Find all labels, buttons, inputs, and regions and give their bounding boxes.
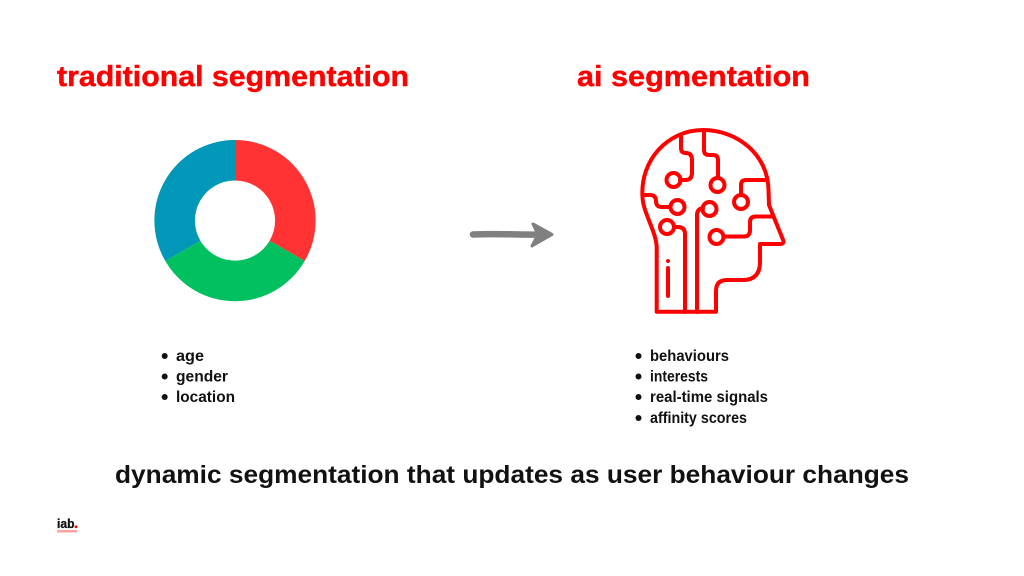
list: traditional attributes: gender: [176, 368, 228, 386]
circuit nodes: [666, 173, 680, 187]
summary statement: dynamic segmentation that updates as user behaviour changes: [115, 461, 909, 489]
list: ai attributes: interests: [650, 368, 708, 386]
circuit lines: [680, 135, 692, 180]
arrow: [473, 224, 552, 246]
list: traditional attributes: age: [176, 348, 204, 365]
list: traditional attributes: [162, 348, 235, 406]
list: ai attributes: behaviours: [650, 348, 729, 365]
small detail: [666, 268, 670, 296]
list: ai attributes: [636, 348, 768, 427]
heading: traditional segmentation: traditional segmentation: [57, 61, 409, 93]
head outline: [642, 130, 784, 312]
list: traditional attributes: location: [176, 389, 235, 406]
logo: iab: iab: [57, 516, 75, 531]
list: ai attributes: affinity scores: [650, 410, 747, 427]
heading: ai segmentation: ai segmentation: [577, 61, 810, 93]
icon: ai head with circuits: [642, 130, 784, 312]
list: ai attributes: real-time signals: [650, 389, 768, 406]
donut chart: [154, 140, 316, 301]
